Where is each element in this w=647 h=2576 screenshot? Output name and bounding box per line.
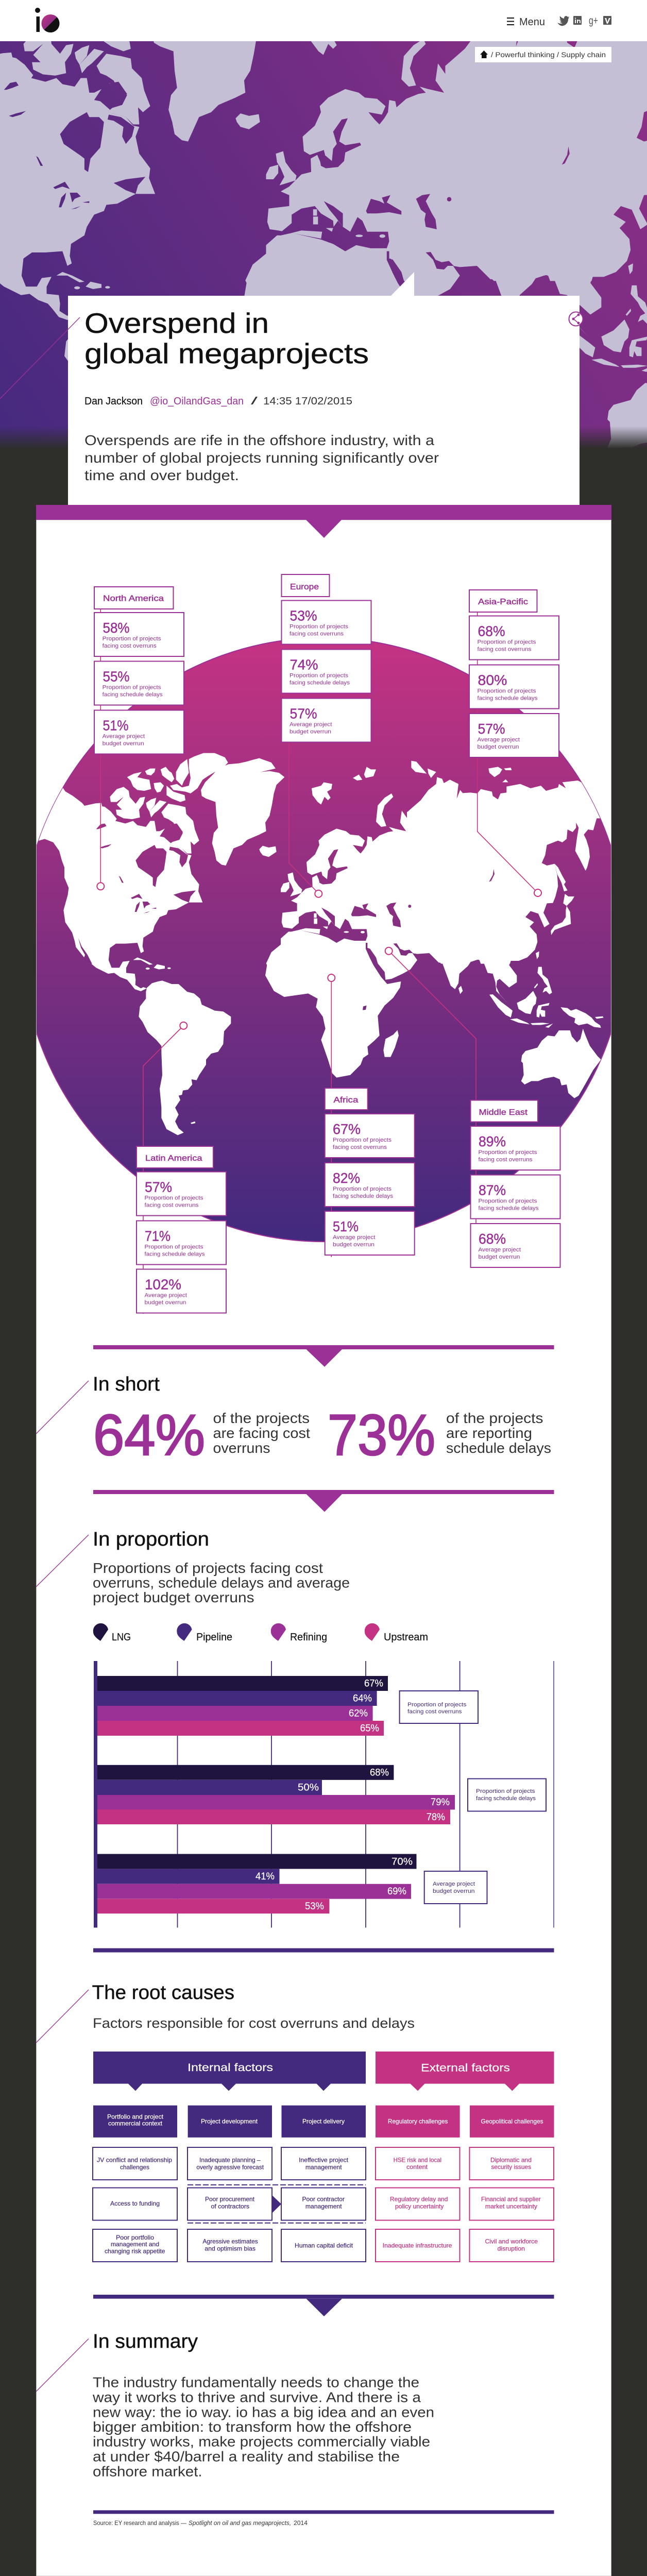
stat: 82% schedule delays: Proportion of projects <box>333 1186 392 1192</box>
stat: 74% schedule delays: Proportion of projects <box>290 673 349 679</box>
heading: The root causes <box>92 1982 234 2004</box>
byline: @io_OilandGas_dan <box>150 396 244 407</box>
external factors grid: Inadequate infrastructure <box>383 2242 452 2249</box>
external factors grid: disruption <box>498 2245 525 2252</box>
chart legend <box>93 1623 428 1643</box>
stat: 51% budget overrun: budget overrun <box>103 741 144 747</box>
bar group: budget overrun: 53% <box>305 1901 324 1912</box>
description: Proportions of projects facing cost <box>93 1560 323 1576</box>
stat: 87% schedule delays <box>471 1175 560 1219</box>
article header panel <box>0 272 580 505</box>
bar group: budget overrun: 41% <box>256 1871 275 1882</box>
panel: Middle East <box>471 1100 560 1267</box>
stat: 68% cost overruns: 68% <box>478 623 505 639</box>
summary text: at under $40/barrel a reality and stabilise the <box>93 2449 400 2465</box>
bar group: schedule delays: 50% <box>298 1783 319 1793</box>
bar group: cost overruns: 64% <box>353 1693 372 1704</box>
stat: 53% cost overruns <box>281 601 371 644</box>
region label: Middle East <box>479 1108 528 1117</box>
stat: 71% schedule delays: Proportion of projects <box>144 1244 203 1250</box>
summary text <box>92 2375 434 2480</box>
stat: 51% budget overrun <box>94 710 184 754</box>
top purple banner with arrow <box>36 505 611 538</box>
region label: Europe <box>290 583 319 591</box>
external factors grid: content <box>406 2163 428 2171</box>
internal factors grid: JV conflict and relationship <box>97 2157 172 2164</box>
bar group: schedule delays <box>97 1765 455 1824</box>
section: in short <box>36 1374 551 1467</box>
bar group: schedule delays: 68% <box>370 1767 389 1778</box>
chart legend: Refining <box>290 1632 327 1643</box>
category headers: Project delivery <box>302 2117 345 2125</box>
stat: 71% schedule delays: 71% <box>145 1228 171 1244</box>
internal factors grid: challenges <box>120 2164 149 2171</box>
stat: 68% cost overruns: facing cost overruns <box>477 646 532 652</box>
chart legend: Pipeline <box>196 1632 232 1643</box>
stat: 57% budget overrun <box>469 714 559 757</box>
description: project budget overruns <box>93 1589 254 1605</box>
stat: 68% budget overrun: budget overrun <box>478 1254 520 1260</box>
icon: social links <box>557 15 611 27</box>
internal factors grid: overly agressive forecast <box>196 2164 264 2171</box>
summary text: industry works, make projects commercially viable <box>93 2434 430 2450</box>
region label <box>137 1146 213 1168</box>
stat: 68% cost overruns <box>469 616 559 659</box>
stat: 57% budget overrun <box>281 699 371 742</box>
panel: Asia-Pacific <box>469 590 559 757</box>
region label: North America <box>103 595 164 603</box>
breadcrumb: / Powerful thinking / Supply chain <box>491 50 606 59</box>
heading: In summary <box>93 2331 198 2352</box>
title <box>84 307 369 369</box>
source note: 2014 <box>294 2519 308 2527</box>
stat: 68% cost overruns: Proportion of projects <box>477 639 536 645</box>
source note <box>93 2519 308 2527</box>
heading: In proportion <box>93 1529 209 1550</box>
site header bar <box>0 0 647 41</box>
big stat: 64%: overruns <box>213 1440 270 1456</box>
stat: 51% budget overrun: Average project <box>103 734 145 740</box>
stat: 58% cost overruns <box>94 613 184 656</box>
callout: budget overrun: budget overrun <box>433 1888 475 1894</box>
stat: 53% cost overruns: facing cost overruns <box>290 631 344 637</box>
stat: 102% budget overrun: Average project <box>144 1292 187 1298</box>
stat: 58% cost overruns: Proportion of projects <box>103 636 161 642</box>
byline: / <box>251 396 258 407</box>
leader lines and location markers <box>97 609 541 1314</box>
category headers: Portfolio and project <box>107 2113 164 2120</box>
region label <box>281 574 330 597</box>
chart legend: Upstream <box>384 1632 428 1643</box>
external factors grid: policy uncertainty <box>395 2203 444 2210</box>
stat: 74% schedule delays <box>281 649 371 693</box>
big stat: 73%: schedule delays <box>446 1440 551 1456</box>
banner: internal factors <box>93 2052 366 2091</box>
stat: 57% cost overruns <box>137 1172 226 1216</box>
globe map <box>37 640 611 1242</box>
stat: 51% budget overrun <box>325 1211 415 1255</box>
internal factors grid: Inadequate planning – <box>199 2157 261 2164</box>
intro text: number of global projects running significantly over <box>84 450 439 466</box>
summary text: way it works to thrive and survive. And there is a <box>92 2389 421 2405</box>
callout: budget overrun: Average project <box>433 1881 475 1887</box>
divider bar <box>93 2510 554 2514</box>
external factors grid: Financial and supplier <box>481 2196 541 2203</box>
internal factors grid: management <box>305 2203 342 2210</box>
stat: 57% cost overruns: facing cost overruns <box>144 1202 199 1209</box>
internal factors grid: management <box>305 2164 342 2171</box>
category headers: Regulatory challenges <box>388 2117 448 2125</box>
arrow: procurement to contractor management <box>273 2196 281 2213</box>
stat: 87% schedule delays: Proportion of projects <box>478 1198 537 1205</box>
external factors grid: security issues <box>491 2163 531 2171</box>
big stat: 64%: 64% <box>93 1403 205 1467</box>
description <box>93 1560 350 1605</box>
stat: 89% cost overruns: 89% <box>479 1133 506 1149</box>
stat: 51% budget overrun: 51% <box>103 717 129 734</box>
byline: 14:35 17/02/2015 <box>263 396 352 407</box>
stat: 58% cost overruns: 58% <box>103 620 130 636</box>
stat: 67% cost overruns <box>325 1114 415 1158</box>
heading: In short <box>93 1374 160 1395</box>
stat: 55% schedule delays <box>94 662 184 705</box>
bar group: schedule delays: 78% <box>427 1812 445 1823</box>
byline <box>84 396 352 407</box>
stat: 102% budget overrun: budget overrun <box>144 1299 186 1306</box>
section: in proportion <box>36 1529 554 1928</box>
big stat: 64% <box>93 1403 310 1467</box>
stat: 87% schedule delays: facing schedule delays <box>478 1206 539 1212</box>
internal factors grid: Access to funding <box>110 2200 160 2207</box>
callout: cost overruns: Proportion of projects <box>407 1702 467 1708</box>
intro text: time and over budget. <box>84 467 239 483</box>
stat: 57% budget overrun: 57% <box>478 721 505 737</box>
external factors grid: Civil and workforce <box>485 2238 538 2245</box>
callout: budget overrun <box>424 1871 487 1904</box>
banner: external factors: External factors <box>421 2062 510 2074</box>
region label <box>471 1100 538 1122</box>
dashed grouping lines <box>188 2185 366 2223</box>
divider bar <box>93 1948 554 1953</box>
menu button <box>507 16 545 28</box>
source note: Spotlight on oil and gas megaprojects, <box>189 2519 291 2527</box>
intro text: Overspends are rife in the offshore industry, with a <box>84 432 434 448</box>
stat: 68% budget overrun <box>471 1224 560 1267</box>
stat: 57% budget overrun: 57% <box>290 706 317 721</box>
external factors grid: Regulatory delay and <box>390 2196 448 2203</box>
region label: Africa <box>333 1096 359 1105</box>
callout: schedule delays <box>468 1778 546 1811</box>
category headers: Geopolitical challenges <box>481 2117 543 2125</box>
stat: 71% schedule delays: facing schedule delays <box>144 1251 205 1257</box>
region label <box>94 587 173 609</box>
description: Factors responsible for cost overruns and delays <box>93 2015 415 2031</box>
big stat: 73%: of the projects <box>446 1410 543 1426</box>
big stat: 64%: are facing cost <box>213 1425 310 1441</box>
bar group: cost overruns: 62% <box>349 1708 368 1719</box>
external factors grid: Diplomatic and <box>490 2157 532 2164</box>
stat: 87% schedule delays: 87% <box>479 1182 506 1198</box>
internal factors grid: and optimism bias <box>205 2245 256 2252</box>
banner: internal factors: Internal factors <box>188 2062 273 2074</box>
chart legend: LNG <box>112 1632 131 1643</box>
panel: North America <box>94 587 184 754</box>
stat: 55% schedule delays: 55% <box>103 669 130 684</box>
internal factors grid: Poor portfolio <box>116 2234 154 2241</box>
external factors grid: market uncertainty <box>485 2203 537 2210</box>
section: the root causes <box>36 1982 554 2262</box>
region label <box>325 1088 368 1110</box>
stat: 82% schedule delays: facing schedule delays <box>333 1193 394 1199</box>
stat: 57% cost overruns: Proportion of projects <box>144 1195 203 1201</box>
internal factors grid: management and <box>111 2241 159 2248</box>
stat: 71% schedule delays <box>137 1221 226 1264</box>
internal factors grid: of contractors <box>211 2203 249 2210</box>
stat: 57% budget overrun: budget overrun <box>477 744 519 750</box>
breadcrumb <box>475 47 611 62</box>
callout: cost overruns <box>400 1691 478 1723</box>
stat: 80% schedule delays: facing schedule delays <box>477 696 538 702</box>
stat: 53% cost overruns: 53% <box>290 608 317 623</box>
internal factors grid: Poor procurement <box>205 2196 255 2203</box>
bar group: cost overruns: 65% <box>360 1723 379 1734</box>
big stat: 73% <box>328 1403 551 1467</box>
external factors grid: HSE risk and local <box>394 2157 441 2164</box>
summary text: offshore market. <box>93 2464 202 2480</box>
stat: 102% budget overrun: 102% <box>145 1277 181 1292</box>
region label <box>469 590 537 612</box>
panel: Europe <box>281 574 371 742</box>
summary text: new way: the io way. io has a big idea and an even <box>93 2404 434 2420</box>
summary text: The industry fundamentally needs to change the <box>93 2375 419 2391</box>
bar group: schedule delays: 79% <box>431 1797 450 1808</box>
title: global megaprojects <box>84 337 369 369</box>
stat: 67% cost overruns: facing cost overruns <box>333 1144 387 1150</box>
diagonal accent line <box>0 317 80 399</box>
bar group: budget overrun <box>97 1854 416 1913</box>
bar group: cost overruns: 67% <box>364 1679 383 1689</box>
icon: io logo <box>35 8 60 32</box>
big stat: 64%: of the projects <box>213 1410 310 1426</box>
stat: 68% budget overrun: Average project <box>478 1247 521 1253</box>
stat: 80% schedule delays: 80% <box>478 672 507 688</box>
region label: Asia-Pacific <box>478 598 528 606</box>
stat: 53% cost overruns: Proportion of projects <box>290 623 349 630</box>
menu button: Menu <box>519 16 545 28</box>
stat: 82% schedule delays <box>325 1163 415 1207</box>
stat: 82% schedule delays: 82% <box>333 1170 360 1186</box>
divider arrow: in proportion <box>93 1490 554 1512</box>
bar group: budget overrun: 70% <box>391 1857 413 1867</box>
region label: Latin America <box>145 1154 202 1163</box>
stat: 89% cost overruns: Proportion of projects <box>478 1149 537 1156</box>
stat: 74% schedule delays: facing schedule delays <box>290 680 350 686</box>
internal factors grid: Agressive estimates <box>202 2238 258 2245</box>
panel: Africa <box>325 1088 415 1255</box>
callout: schedule delays: Proportion of projects <box>476 1788 535 1794</box>
icon: social links: g+ <box>589 15 598 27</box>
stat: 89% cost overruns <box>471 1126 560 1170</box>
category headers: Project development <box>201 2117 258 2125</box>
panel: Latin America <box>137 1146 226 1313</box>
icon: share button <box>569 312 583 326</box>
category headers: commercial context <box>108 2120 163 2127</box>
stat: 80% schedule delays <box>469 665 559 709</box>
stat: 57% budget overrun: budget overrun <box>290 728 331 735</box>
stat: 57% cost overruns: 57% <box>145 1179 172 1195</box>
divider arrow: in short <box>93 1345 554 1367</box>
internal factors grid: changing risk appetite <box>105 2248 165 2255</box>
big stat: 73%: 73% <box>328 1403 435 1467</box>
stat: 89% cost overruns: facing cost overruns <box>478 1157 533 1163</box>
stat: 51% budget overrun: 51% <box>333 1218 359 1234</box>
stat: 51% budget overrun: budget overrun <box>333 1242 374 1248</box>
summary text: bigger ambition: to transform how the offshore <box>93 2419 412 2435</box>
intro text <box>84 432 439 483</box>
byline: Dan Jackson <box>84 396 143 407</box>
stat: 57% budget overrun: Average project <box>477 737 520 743</box>
internal factors grid: Human capital deficit <box>295 2242 353 2249</box>
bar group: budget overrun: 69% <box>387 1886 406 1897</box>
main white content panel <box>36 520 611 2576</box>
stat: 51% budget overrun: Average project <box>333 1234 375 1241</box>
stat: 55% schedule delays: facing schedule delays <box>103 691 163 698</box>
stat: 57% budget overrun: Average project <box>290 721 332 727</box>
title: Overspend in <box>84 307 269 339</box>
banner: external factors <box>376 2052 554 2091</box>
internal factors grid <box>93 2147 366 2262</box>
stat: 102% budget overrun <box>137 1269 226 1313</box>
stat: 74% schedule delays: 74% <box>290 656 318 673</box>
stat: 67% cost overruns: 67% <box>333 1121 361 1137</box>
description: overruns, schedule delays and average <box>93 1574 350 1591</box>
external factors grid <box>376 2147 554 2262</box>
stat: 58% cost overruns: facing cost overruns <box>103 643 157 649</box>
bar group: cost overruns <box>97 1676 388 1736</box>
hero world map background <box>0 41 647 459</box>
callout: schedule delays: facing schedule delays <box>476 1795 536 1802</box>
internal factors grid: Ineffective project <box>299 2157 349 2164</box>
stat: 55% schedule delays: Proportion of projects <box>103 684 161 690</box>
callout: cost overruns: facing cost overruns <box>407 1708 462 1715</box>
internal factors grid: Poor contractor <box>302 2196 345 2203</box>
section: in summary <box>36 2331 434 2480</box>
category headers <box>93 2106 554 2138</box>
big stat: 73%: are reporting <box>446 1425 532 1441</box>
stat: 80% schedule delays: Proportion of projects <box>477 688 536 694</box>
bar chart <box>94 1661 554 1928</box>
source note: Source: EY research and analysis — <box>93 2519 186 2527</box>
divider arrow: in summary <box>93 2295 554 2316</box>
stat: 67% cost overruns: Proportion of projects <box>333 1137 392 1143</box>
stat: 68% budget overrun: 68% <box>479 1231 506 1247</box>
